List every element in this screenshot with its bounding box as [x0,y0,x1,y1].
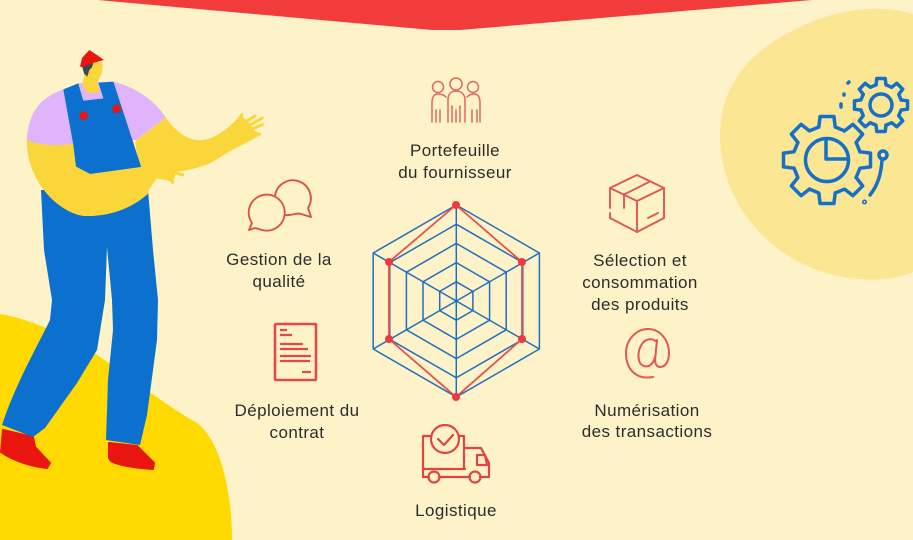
gears icon [784,78,908,204]
overall bib [63,82,142,174]
icon: delivery truck [423,425,489,482]
yellow torso [27,140,148,216]
large gear [784,116,870,204]
hair [82,63,93,77]
label: Gestion de la qualité: qualité [252,272,306,291]
icon: box [610,175,664,232]
heading: Portefeuille du fournisseur: Portefeuille [410,141,500,160]
label: Numérisation des transactions: Numérisation [594,401,700,420]
torso and arms [27,50,262,216]
red top banner [98,0,812,30]
icon: people [432,78,480,122]
pale yellow blob behind gears [720,9,913,280]
label: Déploiement du contrat: Déploiement du [235,401,359,420]
radar grid [373,205,539,397]
near forearm [50,158,177,197]
icon: at sign [626,329,669,378]
lilac shirt [27,82,166,145]
neck and head [82,62,103,93]
label: Gestion de la qualité: Gestion de la [226,250,332,269]
cap [80,50,104,67]
label: Numérisation des transactions: des transactions [582,422,712,441]
trousers [2,190,158,445]
collar [78,83,103,101]
shoes [1,430,154,469]
yellow ground blob [0,314,232,540]
label: Sélection et consommation des produits: Sélection et [593,251,687,270]
label: Sélection et consommation des produits: des produits [591,295,689,314]
small gear [854,78,908,132]
radar data points [385,201,526,401]
far hand fingers [237,115,262,134]
heading: Portefeuille du fournisseur: du fournisseur [398,163,512,182]
gear connector [879,151,887,159]
icon: document [275,324,316,380]
radar data polygon [389,205,522,397]
radar chart [373,201,539,401]
far arm [135,115,258,173]
bib buttons [79,111,88,120]
character illustration [1,50,262,469]
label: Sélection et consommation des produits: consommation [582,273,698,292]
label: Logistique: Logistique [415,501,497,520]
label: Déploiement du contrat: contrat [270,423,324,442]
near hand fingers [163,165,183,182]
icon: speech bubbles [249,180,311,231]
